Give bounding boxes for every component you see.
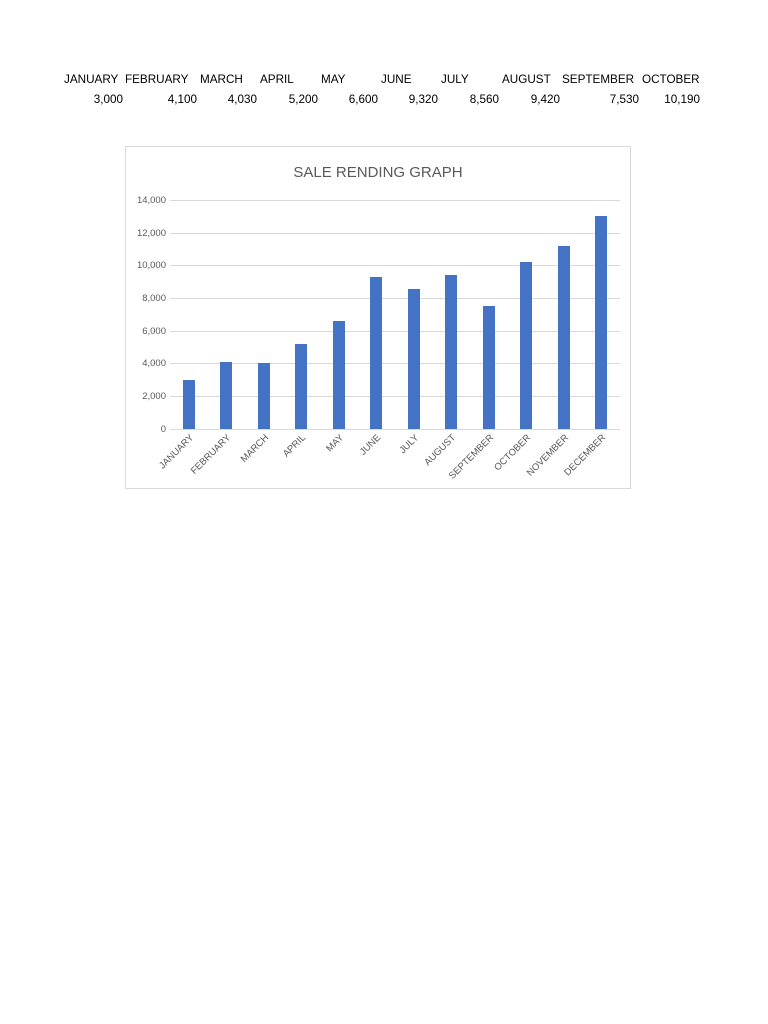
y axis labels: 12,000 <box>137 228 166 239</box>
month labels: MARCH <box>200 73 243 86</box>
x axis labels: APRIL <box>281 432 308 460</box>
y axis labels <box>137 195 166 435</box>
y axis labels: 6,000 <box>142 326 166 337</box>
value row: 7,530 <box>610 93 639 106</box>
month labels: APRIL <box>260 73 294 86</box>
month labels: AUGUST <box>502 73 551 86</box>
x axis labels: NOVEMBER <box>525 432 571 479</box>
y axis labels: 14,000 <box>137 195 166 206</box>
month labels: MAY <box>321 73 346 86</box>
y axis labels: 4,000 <box>142 358 166 369</box>
x axis labels: AUGUST <box>422 432 458 468</box>
month labels <box>64 73 700 86</box>
value row: 4,030 <box>228 93 257 106</box>
x axis labels <box>157 432 608 482</box>
month labels: JULY <box>441 73 469 86</box>
x axis labels: MAY <box>324 432 347 454</box>
value row: 3,000 <box>94 93 123 106</box>
bars <box>183 216 607 429</box>
value row <box>94 93 700 106</box>
month labels: SEPTEMBER <box>562 73 634 86</box>
x axis labels: MARCH <box>239 432 271 465</box>
value row: 9,320 <box>409 93 438 106</box>
x axis labels: FEBRUARY <box>189 432 234 477</box>
x axis labels: JULY <box>397 432 422 456</box>
x axis labels: SEPTEMBER <box>447 432 496 482</box>
y axis labels: 0 <box>161 424 166 435</box>
chart panel <box>126 146 630 488</box>
x axis labels: OCTOBER <box>492 432 533 473</box>
x axis labels: JUNE <box>358 432 383 458</box>
y axis labels: 10,000 <box>137 260 166 271</box>
value row: 8,560 <box>470 93 499 106</box>
y axis labels: 8,000 <box>142 293 166 304</box>
chart title: SALE RENDING GRAPH <box>293 164 463 181</box>
x axis labels: JANUARY <box>157 432 197 471</box>
month labels: OCTOBER <box>642 73 700 86</box>
value row: 6,600 <box>349 93 378 106</box>
value row: 5,200 <box>289 93 318 106</box>
value row: 9,420 <box>531 93 560 106</box>
value row: 4,100 <box>168 93 197 106</box>
month labels: JUNE <box>381 73 412 86</box>
month labels: JANUARY <box>64 73 119 86</box>
x axis labels: DECEMBER <box>562 432 608 478</box>
y axis labels: 2,000 <box>142 391 166 402</box>
month labels: FEBRUARY <box>125 73 189 86</box>
value row: 10,190 <box>664 93 700 106</box>
header table <box>64 73 700 106</box>
